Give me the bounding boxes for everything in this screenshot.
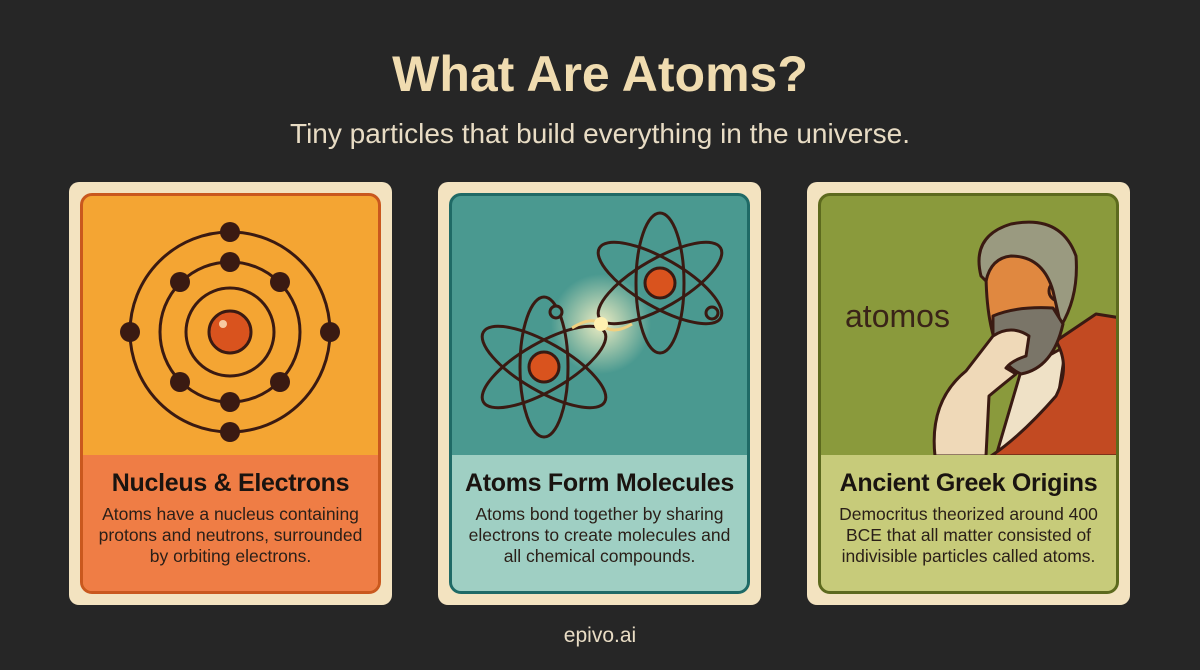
text block: [83, 455, 378, 591]
text block: [452, 455, 747, 591]
illustration: philosopher: [932, 220, 1116, 455]
panel: ancient greek: [807, 182, 1130, 605]
text block: [821, 455, 1116, 591]
panel: molecules: [438, 182, 761, 605]
text block: Atoms Form Molecules: [465, 469, 734, 497]
text block: Ancient Greek Origins: [840, 469, 1097, 497]
panel: nucleus & electrons: [69, 182, 392, 605]
text block: Democritus theorized around 400 BCE that all matter consisted of indivisible particles called atoms.: [839, 504, 1098, 566]
icon: bonded atoms: [480, 212, 724, 438]
footer: epivo.ai: [564, 624, 636, 647]
subtitle: Tiny particles that build everything in the universe.: [290, 118, 910, 149]
text block: Nucleus & Electrons: [112, 469, 349, 497]
text block: Atoms bond together by sharing electrons to create molecules and all chemical compounds.: [469, 504, 730, 566]
title: What Are Atoms?: [392, 46, 808, 102]
icon: bohr atom: [120, 222, 340, 442]
text block: Atoms have a nucleus containing protons and neutrons, surrounded by orbiting electrons.: [99, 504, 362, 566]
label: atomos: atomos: [845, 298, 950, 334]
